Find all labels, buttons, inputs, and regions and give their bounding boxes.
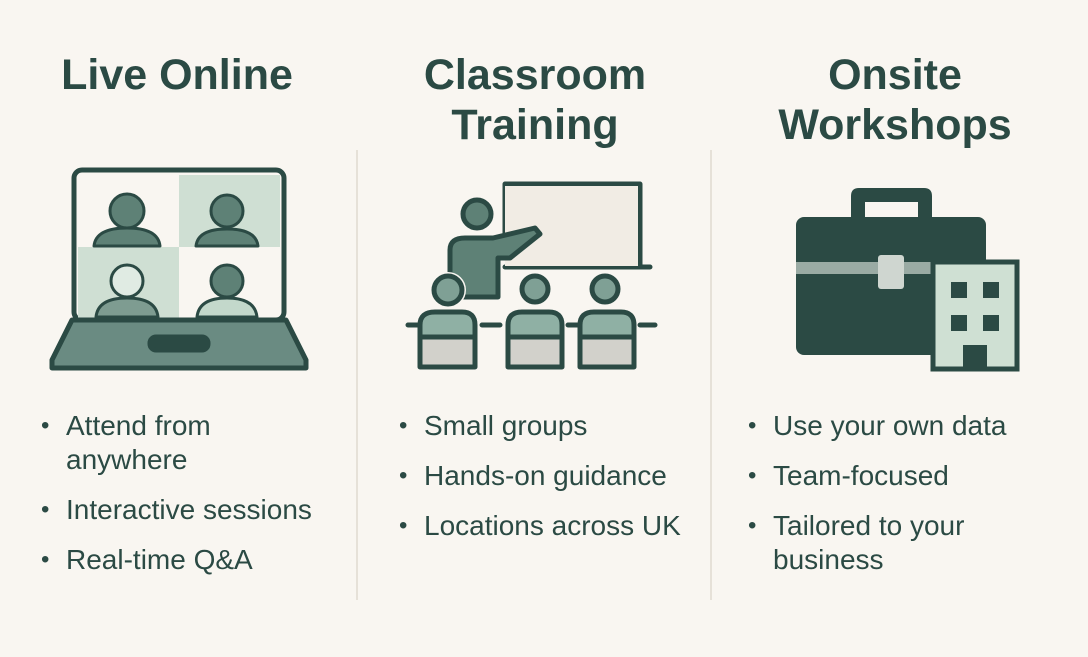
list: Classroom: Small groups [424,410,587,441]
list: Onsite: business [773,544,884,575]
list: Onsite: Use your own data [773,410,1006,441]
title: Classroom Training [424,51,646,149]
list: Classroom: Locations across UK [424,510,681,541]
title: Onsite Workshops [778,51,1012,149]
list: Onsite: Team-focused [773,460,949,491]
title: Onsite Workshops: Workshops [778,101,1012,149]
list: Live Online [42,410,312,575]
title: Classroom Training: Training [451,101,619,149]
list: Classroom: Hands-on guidance [424,460,667,491]
list: Classroom [400,410,681,541]
title: Classroom Training: Classroom [424,51,646,99]
title: Onsite Workshops: Onsite [828,51,962,99]
title: Live Online: Live Online [61,51,293,99]
list: Onsite: Tailored to your [773,510,964,541]
list: Live Online: Attend from [66,410,211,441]
list: Live Online: anywhere [66,444,187,475]
list: Live Online: Real-time Q&A [66,544,253,575]
list: Live Online: Interactive sessions [66,494,312,525]
list: Onsite [748,410,1006,575]
